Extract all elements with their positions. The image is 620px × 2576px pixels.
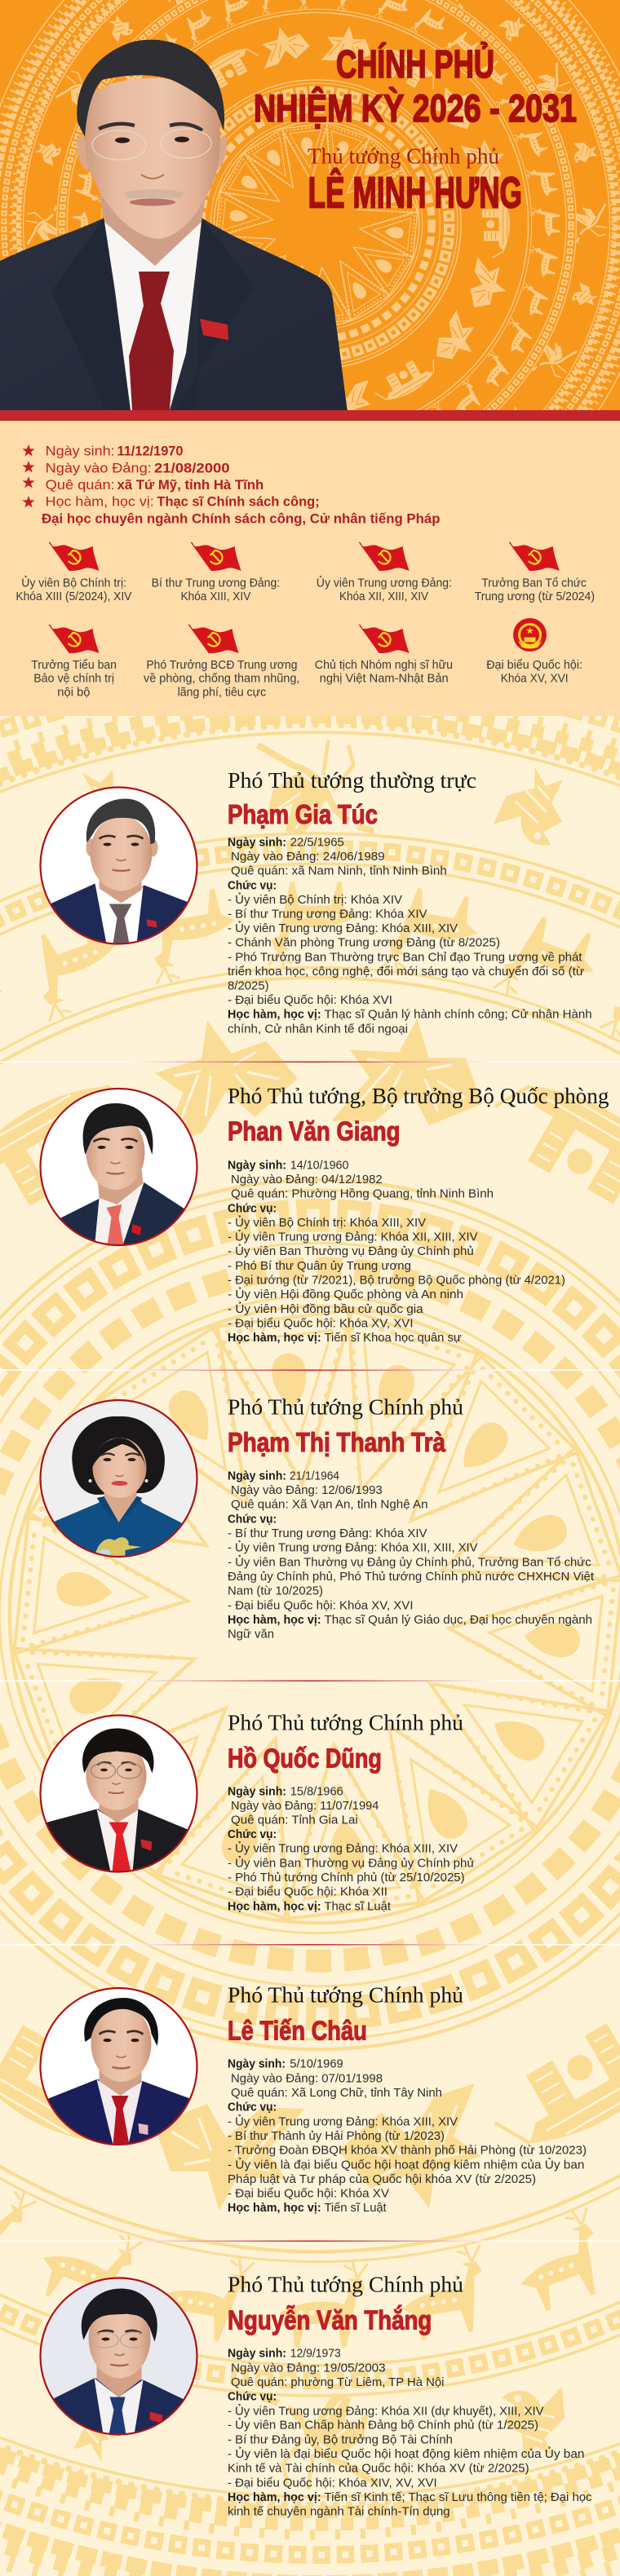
biography text: Quê quán: Phường Hồng Quang, tỉnh Ninh Bình: [231, 1188, 494, 1201]
biography text: Học hàm, học vị:: [228, 1332, 321, 1345]
biography text: - Ủy viên Ban Thường vụ Đảng ủy Chính phủ: [228, 1244, 474, 1258]
icon row: other positions: nghị Việt Nam-Nhật Bản: [320, 673, 449, 686]
biography text: [228, 1785, 474, 1913]
portrait: Phạm Gia Túc: [38, 788, 201, 944]
biography text: [228, 1159, 565, 1345]
biography text: - Ủy viên Trung ương Đảng: Khóa XII, XIII, XIV: [228, 1230, 478, 1244]
role title: Phó Thủ tướng Chính phủ: [228, 2273, 464, 2297]
icon row: party positions: Khóa XII, XIII, XIV: [339, 590, 428, 603]
icon row: party positions: Trung ương (từ 5/2024): [475, 590, 595, 603]
portrait: Phan Văn Giang: [38, 1089, 201, 1245]
biography text: - Bí thư Đảng ủy, Bộ trưởng Bộ Tài Chính: [228, 2433, 453, 2446]
biography text: Học hàm, học vị:: [228, 1009, 321, 1022]
biography text: Quê quán: Xã Vạn An, tỉnh Nghệ An: [231, 1499, 427, 1512]
role title: Phó Thủ tướng Chính phủ: [228, 1982, 464, 2007]
list: key facts: 11/12/1970: [117, 443, 183, 458]
biography text: Ngày vào Đảng: 07/01/1998: [231, 2072, 383, 2085]
biography text: chính, Cử nhân Kinh tế đối ngoại: [228, 1023, 408, 1036]
list: key facts: Ngày vào Đảng:: [46, 460, 152, 475]
name: Phan Văn Giang: [228, 1116, 400, 1147]
biography text: Học hàm, học vị:: [228, 2202, 321, 2215]
biography text: - Ủy viên Ban Thường vụ Đảng ủy Chính phủ: [228, 1855, 474, 1870]
panel: Phạm Thị Thanh Trà: [38, 1394, 594, 1641]
biography text: - Ủy viên Hội đồng Quốc phòng và An ninh: [228, 1287, 463, 1301]
biography text: - Đại biểu Quốc hội: Khóa XV, XVI: [228, 1318, 413, 1331]
biography text: Ngày vào Đảng: 19/05/2003: [231, 2362, 386, 2375]
biography text: 21/1/1964: [290, 1470, 339, 1483]
biography text: Ngày sinh:: [228, 1785, 286, 1798]
biography text: - Chánh Văn phòng Trung ương Đảng (từ 8/2025): [228, 937, 500, 950]
role title: Phó Thủ tướng Chính phủ: [228, 1394, 464, 1419]
list: key facts: [22, 443, 440, 526]
biography text: - Đại tướng (từ 7/2021), Bộ trưởng Bộ Quốc phòng (từ 4/2021): [228, 1274, 565, 1287]
biography text: 22/5/1965: [290, 837, 344, 850]
biography text: Quê quán: Xã Long Chữ, tỉnh Tây Ninh: [231, 2087, 442, 2100]
list: key facts: xã Tứ Mỹ, tỉnh Hà Tĩnh: [117, 477, 264, 493]
biography text: [228, 2348, 592, 2519]
biography text: - Đại biểu Quốc hội: Khóa XV: [228, 2188, 389, 2201]
icon row: other positions: nội bộ: [57, 686, 90, 699]
biography text: - Ủy viên Trung ương Đảng: Khóa XIII, XIV: [228, 2114, 458, 2128]
biography text: - Bí thư Thành ủy Hải Phòng (từ 1/2023): [228, 2130, 445, 2143]
biography text: - Đại biểu Quốc hội: Khóa XV, XVI: [228, 1599, 413, 1612]
biography text: Học hàm, học vị:: [228, 1900, 321, 1913]
biography text: Thạc sĩ Quản lý Giáo dục, Đại học chuyên ngành: [325, 1614, 592, 1627]
biography text: Ngữ văn: [228, 1628, 274, 1641]
biography text: Ngày vào Đảng: 11/07/1994: [231, 1800, 379, 1813]
icon row: other positions: lãng phí, tiêu cực: [178, 686, 266, 699]
biography text: - Ủy viên Ban Thường vụ Đảng ủy Chính phủ, Trưởng Ban Tổ chức: [228, 1554, 591, 1569]
icon row: party positions: Khóa XIII (5/2024), XIV: [16, 590, 132, 603]
biography text: - Ủy viên Trung ương Đảng: Khóa XII, XIII, XIV: [228, 1540, 478, 1555]
biography text: Chức vụ:: [228, 1513, 277, 1526]
icon row: party positions: Khóa XIII, XIV: [181, 590, 251, 603]
biography text: Pháp luật và Tư pháp của Quốc hội khóa XV (từ 2/2025): [228, 2173, 536, 2186]
biography text: - Ủy viên Bộ Chính trị: Khóa XIV: [228, 892, 402, 907]
biography text: - Ủy viên Hội đồng bầu cử quốc gia: [228, 1301, 424, 1316]
biography text: Quê quán: xã Nam Ninh, tỉnh Ninh Bình: [231, 865, 447, 878]
biography text: 15/8/1966: [290, 1785, 343, 1798]
biography text: - Bí thư Trung ương Đảng: Khóa XIV: [228, 1527, 427, 1540]
name: Lê Tiến Châu: [228, 2016, 367, 2046]
biography text: - Ủy viên Trung ương Đảng: Khóa XII (dự khuyết), XIII, XIV: [228, 2403, 544, 2418]
biography text: triển khoa học, công nghệ, đổi mới sáng tạo và chuyển đổi số (từ: [228, 965, 584, 979]
biography text: - Đại biểu Quốc hội: Khóa XII: [228, 1886, 388, 1899]
name: Phạm Gia Túc: [228, 799, 378, 829]
panel: Phạm Gia Túc: [38, 768, 592, 1036]
biography text: 14/10/1960: [290, 1159, 349, 1172]
biography text: Ngày vào Đảng: 24/06/1989: [231, 851, 385, 864]
portrait: Phạm Thị Thanh Trà: [38, 1400, 201, 1557]
biography text: Đảng ủy Chính phủ, Phó Thủ tướng Chính phủ nước CHXHCN Việt: [228, 1571, 594, 1584]
biography text: - Ủy viên Bộ Chính trị: Khóa XIII, XIV: [228, 1215, 426, 1230]
biography text: Học hàm, học vị:: [228, 1614, 321, 1627]
biography text: Chức vụ:: [228, 2101, 277, 2114]
biography text: Thạc sĩ Luật: [325, 1900, 391, 1913]
biography text: Ngày sinh:: [228, 1470, 286, 1483]
portrait: Prime Minister: [0, 40, 348, 412]
panel: Nguyễn Văn Thắng: [38, 2273, 592, 2519]
icon row: party positions: [16, 542, 595, 603]
panel: Lê Tiến Châu: [38, 1982, 587, 2215]
heading: prime minister role: Thủ tướng Chính phủ: [308, 144, 499, 169]
icon row: other positions: [31, 618, 582, 699]
biography text: - Đại biểu Quốc hội: Khóa XVI: [228, 994, 392, 1007]
biography text: Tiến sĩ Luật: [325, 2202, 387, 2215]
panel: header: [0, 0, 620, 410]
icon row: party positions: Ủy viên Bộ Chính trị:: [21, 575, 126, 590]
biography text: Ngày sinh:: [228, 1159, 286, 1172]
biography text: Ngày sinh:: [228, 2058, 286, 2071]
biography text: - Bí thư Trung ương Đảng: Khóa XIV: [228, 908, 427, 921]
panel: prime minister biography: [0, 425, 620, 716]
biography text: - Phó Trưởng Ban Thường trực Ban Chỉ đạo Trung ương về phát: [228, 951, 582, 964]
heading: government term: [254, 42, 577, 130]
biography text: Chức vụ:: [228, 2391, 277, 2404]
header drum pattern: [0, 0, 620, 410]
icon row: party positions: Trưởng Ban Tổ chức: [481, 577, 587, 590]
biography text: - Ủy viên Ban Chấp hành Đảng bộ Chính phủ (từ 1/2025): [228, 2418, 538, 2432]
icon row: party positions: Ủy viên Trung ương Đảng:: [317, 575, 452, 590]
biography text: 12/9/1973: [290, 2348, 341, 2361]
icon row: other positions: Chủ tịch Nhóm nghị sĩ hữu: [315, 659, 453, 672]
header orange background: [0, 0, 620, 412]
heading: government term: CHÍNH PHỦ: [336, 42, 494, 86]
biography text: [228, 1470, 594, 1641]
biography text: - Ủy viên là đại biểu Quốc hội hoạt động kiêm nhiệm của Ủy ban: [228, 2446, 584, 2461]
biography text: - Đại biểu Quốc hội: Khóa XIV, XV, XVI: [228, 2477, 437, 2490]
biography text: Chức vụ:: [228, 1828, 277, 1841]
biography background: [0, 425, 620, 716]
icon row: other positions: Phó Trưởng BCĐ Trung ương: [146, 659, 297, 672]
portrait: Nguyễn Văn Thắng: [38, 2278, 201, 2435]
list: key facts: Học hàm, học vị:: [46, 494, 154, 510]
divider lines: [0, 1062, 620, 2242]
role title: Phó Thủ tướng thường trực: [228, 768, 476, 793]
biography text: [228, 2058, 587, 2215]
role title: Phó Thủ tướng, Bộ trưởng Bộ Quốc phòng: [228, 1084, 609, 1108]
biography text: - Ủy viên Trung ương Đảng: Khóa XIII, XIV: [228, 921, 458, 935]
biography text: Ngày vào Đảng: 04/12/1982: [231, 1173, 383, 1186]
icon row: other positions: Khóa XV, XVI: [501, 673, 569, 686]
biography text: Nam (từ 10/2025): [228, 1585, 323, 1598]
biography text: 5/10/1969: [290, 2058, 343, 2071]
icon row: other positions: về phòng, chống tham nhũng,: [144, 673, 299, 686]
icon row: other positions: Trưởng Tiểu ban: [31, 659, 117, 672]
biography text: Tiến sĩ Khoa học quân sự: [325, 1332, 462, 1345]
biography text: Chức vụ:: [228, 1202, 277, 1215]
icon row: other positions: Bảo vệ chính trị: [33, 673, 114, 686]
biography text: Học hàm, học vị:: [228, 2491, 321, 2504]
role title: Phó Thủ tướng Chính phủ: [228, 1711, 464, 1735]
biography text: Ngày sinh:: [228, 2348, 286, 2361]
list: key facts: Thạc sĩ Chính sách công;: [157, 494, 320, 510]
biography text: Kinh tế và Tài chính của Quốc hội: Khóa XV (từ 2/2025): [228, 2463, 529, 2476]
red band under header: [0, 410, 620, 425]
biography text: - Phó Bí thư Quân ủy Trung ương: [228, 1260, 411, 1273]
biography text: Quê quán: phường Từ Liêm, TP Hà Nội: [231, 2376, 444, 2389]
list: key facts: Đại học chuyên ngành Chính sách công, Cử nhân tiếng Pháp: [42, 510, 441, 526]
background: lower drum pattern: [0, 599, 620, 2576]
panel: Hồ Quốc Dũng: [38, 1711, 474, 1913]
panel: Phan Văn Giang: [38, 1084, 609, 1345]
name: Hồ Quốc Dũng: [228, 1743, 382, 1774]
biography text: 8/2025): [228, 980, 269, 993]
biography text: Chức vụ:: [228, 879, 277, 892]
icon row: party positions: Bí thư Trung ương Đảng:: [152, 577, 280, 590]
biography text: Ngày vào Đảng: 12/06/1993: [231, 1484, 383, 1497]
biography text: Quê quán: Tỉnh Gia Lai: [231, 1814, 358, 1827]
biography text: - Ủy viên Trung ương Đảng: Khóa XIII, XIV: [228, 1841, 458, 1856]
biography text: - Trưởng Đoàn ĐBQH khóa XV thành phố Hải Phòng (từ 10/2023): [228, 2145, 587, 2158]
list: key facts: Quê quán:: [46, 477, 115, 493]
name: Nguyễn Văn Thắng: [228, 2305, 432, 2335]
biography text: Thạc sĩ Quản lý hành chính công; Cử nhân Hành: [325, 1009, 592, 1022]
biography text: kinh tế chuyên ngành Tài chính-Tín dụng: [228, 2506, 450, 2519]
portrait: Hồ Quốc Dũng: [38, 1716, 201, 1872]
name: Phạm Thị Thanh Trà: [228, 1427, 446, 1457]
biography text: Tiến sĩ Kinh tế; Thạc sĩ Lưu thông tiền tệ; Đại học: [325, 2491, 592, 2504]
biography text: [228, 837, 592, 1036]
biography text: - Ủy viên là đại biểu Quốc hội hoạt động kiêm nhiệm của Ủy ban: [228, 2157, 584, 2172]
biography text: Ngày sinh:: [228, 837, 286, 850]
biography text: - Phó Thủ tướng Chính phủ (từ 25/10/2025): [228, 1871, 465, 1885]
portrait: Lê Tiến Châu: [38, 1988, 201, 2145]
icon row: other positions: Đại biểu Quốc hội:: [486, 659, 582, 672]
list: key facts: 21/08/2000: [154, 460, 230, 475]
list: key facts: Ngày sinh:: [46, 443, 115, 458]
